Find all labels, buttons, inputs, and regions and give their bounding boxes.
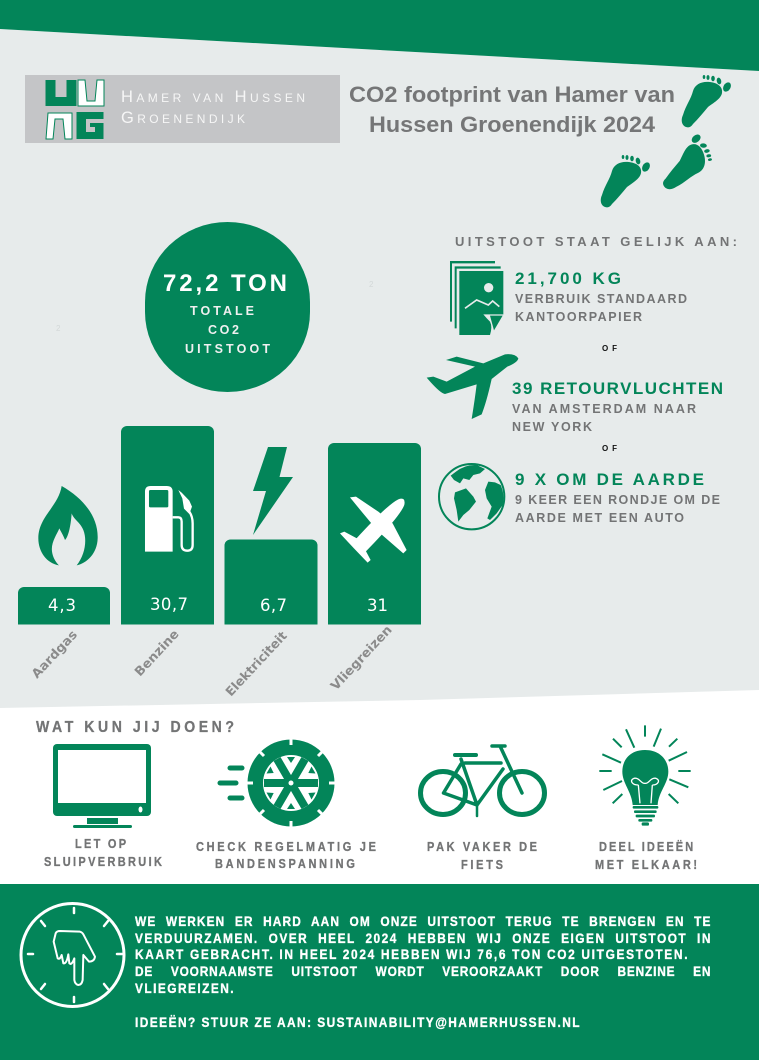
bar: Aardgas [18,587,110,624]
footer text: DE VOORNAAMSTE UITSTOOT WORDT VEROORZAAKT DOOR BENZINE EN [135,963,710,979]
value: Vliegreizen: 31 [367,596,388,615]
bar: Benzine [121,426,214,624]
value: Benzine: 30,7 [150,595,188,614]
caption: monitor [44,837,162,869]
footer text [135,913,711,1030]
equivalent: paper [515,269,687,324]
caption: bulb: DEEL IDEEËN [599,840,693,854]
icon: footprint 1 [682,75,733,127]
equivalent: flights: VAN AMSTERDAM NAAR [512,402,696,416]
logo [25,75,340,143]
logo: Groenendijk [121,109,245,127]
icon: large airplane [427,354,518,419]
footer text: IDEEËN? STUUR ZE AAN: SUSTAINABILITY@HAMERHUSSEN.NL [135,1014,580,1030]
icon: fuel pump [145,486,193,552]
icon: monitor [53,744,151,828]
icon: paper stack [450,261,503,335]
equivalent: paper: KANTOORPAPIER [515,310,642,324]
total emissions badge: UITSTOOT [185,342,270,356]
icon: tyre [220,739,335,827]
equivalent: around the earth: 9 KEER EEN RONDJE OM DE [515,493,720,507]
top green banner [0,0,759,71]
icon: light bulb [599,725,691,826]
equivalent: paper: 21,700 KG [515,269,621,288]
equivalent: around the earth: AARDE MET EEN AUTO [515,511,684,525]
separator: of: OF [602,344,617,353]
icon: white airplane [340,497,407,563]
caption: bulb [595,840,697,872]
label: Aardgas: Aardgas [28,627,80,681]
icon: footprint 3 [655,131,716,190]
title [349,82,675,137]
footer text: VLIEGREIZEN. [135,980,234,996]
caption: tyre [196,840,376,871]
icon: globe [439,464,504,529]
title: Hussen Groenendijk 2024 [369,112,656,137]
total emissions badge: 72,2 TON [163,270,287,297]
bar: Vliegreizen [328,443,421,624]
icon: bicycle [420,746,544,816]
caption: bicycle: PAK VAKER DE [427,840,537,854]
equivalent: flights: 39 RETOURVLUCHTEN [512,379,723,398]
logo: Hamer van Hussen [121,88,305,106]
label: Vliegreizen: Vliegreizen [327,622,395,693]
label: Benzine: Benzine [131,626,182,679]
bar chart [18,426,421,699]
caption: bulb: MET ELKAAR! [595,858,697,872]
total emissions badge: TOTALE [190,304,254,318]
total emissions badge [145,222,310,392]
icon: footprint 2 [601,155,652,207]
footer text: VERDUURZAMEN. OVER HEEL 2024 HEBBEN WIJ ONZE EIGEN UITSTOOT IN [135,930,710,946]
caption: tyre: BANDENSPANNING [215,857,355,871]
caption: monitor: SLUIPVERBRUIK [44,855,162,869]
faint marker: 2 [56,324,61,333]
value: Aardgas: 4,3 [48,596,76,615]
heading: what can you do: WAT KUN JIJ DOEN? [36,718,234,736]
footer text: KAART GEBRACHT. IN HEEL 2024 HEBBEN WIJ 76,6 TON CO2 UITGESTOTEN. [135,946,688,962]
heading: equivalents: UITSTOOT STAAT GELIJK AAN: [455,234,737,249]
equivalent: around the earth [515,470,720,525]
value: Elektriciteit: 6,7 [260,596,287,615]
caption: monitor: LET OP [75,837,126,851]
caption: tyre: CHECK REGELMATIG JE [196,840,376,854]
footer text: WE WERKEN ER HARD AAN OM ONZE UITSTOOT TERUG TE BRENGEN EN TE [135,913,711,929]
title: CO2 footprint van Hamer van [349,82,675,107]
caption: bicycle: FIETS [461,858,503,872]
caption: bicycle [427,840,537,872]
equivalent: flights [512,379,723,434]
label: Elektriciteit: Elektriciteit [222,628,290,699]
total emissions badge: CO2 [208,323,239,337]
icon: lightning bolt [253,447,293,535]
icon: clock with pointing hand [21,904,124,1006]
equivalent: around the earth: 9 X OM DE AARDE [515,470,704,489]
separator: of: OF [602,444,617,453]
equivalent: paper: VERBRUIK STANDAARD [515,292,687,306]
bar: Elektriciteit [224,540,318,624]
equivalent: flights: NEW YORK [512,420,592,434]
panel: footer [0,884,759,1060]
icon: flame [38,486,98,565]
faint marker: 2 [369,280,374,289]
panel: light grey background [0,29,759,708]
